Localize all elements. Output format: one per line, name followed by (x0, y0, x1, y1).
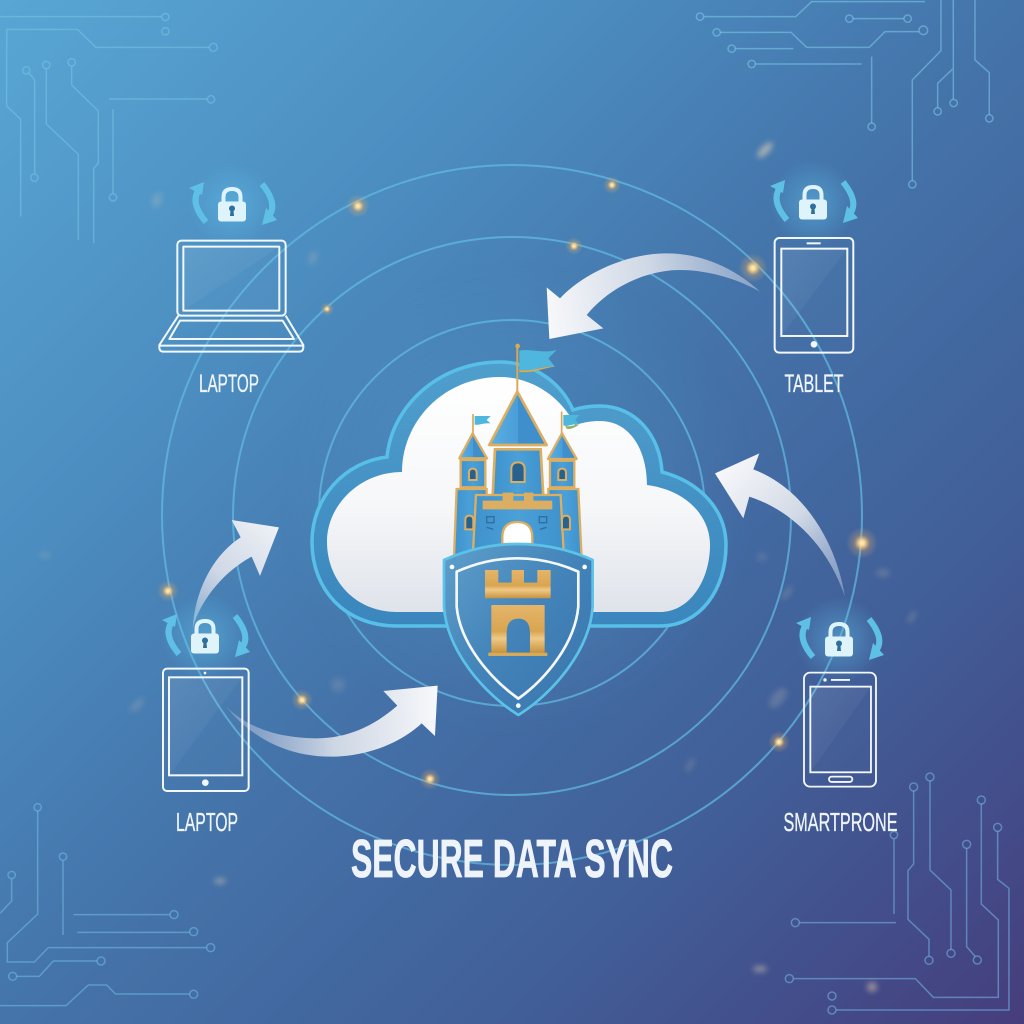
device: laptop top left (159, 161, 303, 398)
blurred light particles (39, 140, 918, 992)
device: tablet top right (769, 159, 858, 398)
title: SECURE DATA SYNC (351, 829, 673, 889)
circuit traces: bottom right (785, 773, 1009, 1014)
icon: laptop (159, 241, 303, 352)
label: LAPTOP (199, 370, 259, 398)
icon: lock with sync arrows (188, 161, 277, 249)
towers (454, 489, 487, 558)
icon: lock with sync arrows (795, 596, 884, 684)
device: smartphone lower right (784, 596, 898, 837)
orange sparkle nodes (157, 176, 878, 790)
roofs (489, 392, 547, 445)
battlement (483, 493, 552, 509)
icon: lock with sync arrows (161, 593, 250, 681)
concentric sync rings (162, 165, 862, 865)
main flag (515, 344, 557, 393)
gate arch (502, 522, 532, 544)
circuit traces: bottom left (0, 804, 215, 1006)
icon: smartphone (804, 673, 876, 787)
icon: tablet (163, 669, 249, 791)
shield (444, 544, 593, 715)
arrow: lower device to shield (226, 686, 438, 757)
castle (444, 344, 593, 715)
label: LAPTOP (176, 807, 238, 837)
small wall marks (487, 517, 547, 529)
arrow: smartphone to cloud (715, 453, 845, 597)
arrow: tablet to cloud (547, 253, 760, 339)
gold tower emblem (485, 570, 551, 656)
left and right turret flags (473, 412, 579, 434)
device: tablet lower left (161, 593, 250, 837)
icon: tablet (775, 238, 853, 353)
central cloud with castle and shield (278, 260, 758, 740)
arrow: lower device up to cloud (193, 520, 279, 628)
cloud (278, 260, 758, 740)
windows (465, 462, 570, 529)
icon: lock with sync arrows (769, 159, 858, 247)
circuit traces: top left (0, 13, 217, 243)
label: TABLET (784, 370, 844, 398)
label: SMARTPRONE (784, 807, 898, 837)
circuit traces: top right (696, 0, 993, 188)
